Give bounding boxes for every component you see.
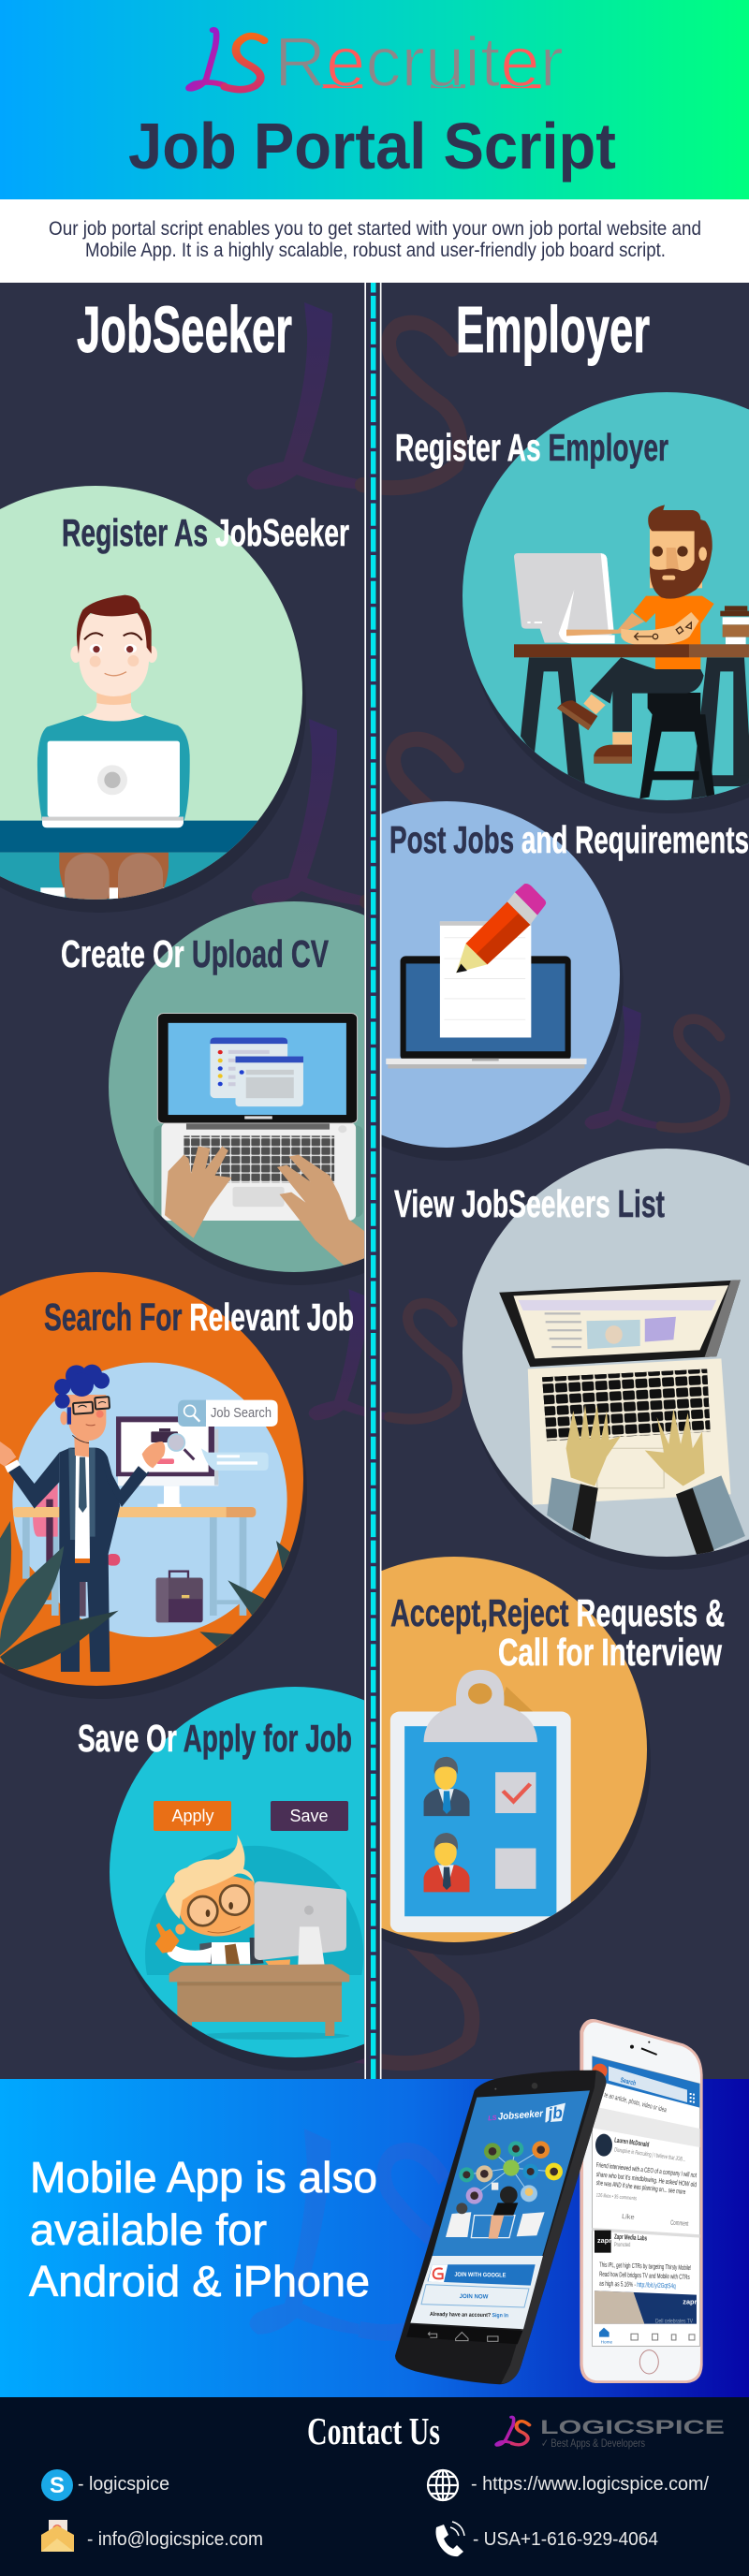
image: iPhone with feed [580, 2019, 703, 2383]
contact: skype [41, 2469, 169, 2501]
panel: mobile app band [0, 2079, 749, 2397]
heading: Contact Us: Contact Us [307, 2409, 440, 2452]
text: mobile app availability: available for [30, 2205, 267, 2254]
step circle: View JobSeekers List [463, 1149, 749, 1570]
step circle: Post Jobs and Requirements [382, 801, 624, 1161]
button: Save [271, 1801, 348, 1831]
contact: website [428, 2470, 709, 2500]
label: Create Or Upload CV: Create Or Upload CV [61, 932, 329, 975]
image: iPhone with feed: zapr [683, 2298, 698, 2306]
background panel: dark body [0, 283, 749, 2079]
label: Register As JobSeeker: Register As JobSeeker [62, 511, 349, 554]
image: iPhone with feed: Like [622, 2212, 635, 2221]
label: Save Or Apply for Job: Save Or Apply for Job [78, 1717, 352, 1760]
intro text [49, 218, 701, 261]
label: Accept, Reject Requests and Call for Interview [390, 1591, 725, 1674]
heading: Employer: Employer [456, 293, 650, 366]
logo: LS Recruiter: Recruiter [274, 22, 564, 101]
step circle: Register As Employer [463, 392, 749, 813]
contact: skype: S [50, 2473, 65, 2498]
image: iPhone with feed: zapr [597, 2236, 611, 2245]
icon: man at desk with apply and save buttons [145, 1801, 363, 2040]
icon: boy with laptop [0, 595, 258, 900]
image: Android phone with job seeker app: Already have an account? Sign In [430, 2312, 508, 2319]
icon: bearded man at desk [514, 505, 749, 798]
image: Android phone with job seeker app: JOIN NOW [460, 2293, 488, 2301]
image: Android phone with job seeker app: jb [545, 2102, 564, 2123]
label: View JobSeekers List: View JobSeekers List [394, 1182, 665, 1225]
icon: top-down laptop with hands [499, 1280, 745, 1557]
image: iPhone with feed: Lauren McDonald [614, 2135, 650, 2148]
step circle: Register As JobSeeker [0, 486, 312, 913]
title: Job Portal Script [128, 110, 616, 183]
logo: Logicspice: LOGICSPICE [540, 2417, 725, 2438]
watermark: LS on blue band [250, 2129, 452, 2334]
step circle: Create Or Upload CV [109, 901, 364, 1285]
step circle: Accept, Reject Requests [382, 1557, 651, 1955]
image: iPhone with feed: Dell celebrates TV [655, 2319, 693, 2325]
logo: Logicspice [496, 2417, 725, 2450]
image: Android phone with job seeker app: LS [488, 2114, 497, 2122]
image: Android phone with job seeker app [395, 2071, 606, 2384]
contact: email: - info@logicspice.com [87, 2529, 263, 2550]
image: iPhone with feed: Zapr Media Labs [614, 2232, 647, 2242]
image: iPhone with feed: Disruptive in Recruiting | I believe that JOB... [614, 2146, 686, 2163]
button: Save: Save [289, 1807, 329, 1825]
intro text: Mobile App. It is a highly scalable, robust and user-friendly job board script. [85, 240, 666, 261]
step circle: Save Or Apply for Job [110, 1687, 364, 2071]
label: Register As Employer: Register As Employer [395, 426, 668, 469]
contact: phone [436, 2522, 658, 2556]
icon: clipboard with candidates [390, 1670, 571, 1932]
divider: central dashed line [364, 283, 382, 2079]
icon: businessman at job search desk [0, 1363, 290, 1672]
intro band [0, 199, 749, 283]
image: iPhone with feed: Read how Dell bridges TV and Mobile with CTRs [599, 2270, 690, 2281]
label: Search For Relevant Job: Search For Relevant Job [44, 1295, 354, 1339]
watermark: repeated LS logo [247, 302, 726, 2065]
text: mobile app availability: Android & iPhone [29, 2257, 370, 2305]
header band [0, 0, 749, 199]
label: Job Search pill: Job Search [211, 1405, 272, 1421]
image: iPhone with feed: Home [601, 2339, 612, 2344]
image: iPhone with feed: Comment [670, 2218, 689, 2228]
contact: phone: - USA+1-616-929-4064 [473, 2529, 658, 2550]
image: iPhone with feed: share who but it's mindblowing. He asked HOW old [595, 2170, 697, 2188]
logo: Logicspice: ✓ Best Apps & Developers [541, 2437, 645, 2450]
image: iPhone with feed: she was AND if she was planning on... see more [595, 2178, 686, 2196]
panel: JobSeeker column circles [0, 486, 484, 2071]
image: Android phone with job seeker app: Jobseeker [497, 2108, 544, 2123]
button: Apply [154, 1801, 231, 1831]
text: mobile app availability: Mobile App is also [30, 2153, 377, 2202]
panel: Employer column circles [261, 392, 749, 1955]
button: Apply: Apply [171, 1807, 214, 1825]
image: iPhone with feed: as high as 5.16% - http://bit.ly/2GqtS4q [599, 2279, 676, 2290]
contact: email [41, 2520, 263, 2552]
image: iPhone with feed: Promoted [614, 2243, 630, 2248]
heading: JobSeeker: JobSeeker [77, 293, 292, 366]
contact: skype: - logicspice [78, 2474, 169, 2495]
icon: laptop with note and pencil [386, 884, 587, 1068]
text: mobile app availability [29, 2153, 377, 2305]
step circle: Search For Relevant Job [0, 1272, 307, 1699]
contact: website: - https://www.logicspice.com/ [471, 2474, 709, 2495]
footer band [0, 2397, 749, 2576]
icon: laptop typing [154, 1014, 365, 1266]
image: Android phone with job seeker app: JOIN WITH GOOGLE [454, 2272, 506, 2279]
image: iPhone with feed: te an article, photo, video or idea [603, 2090, 668, 2115]
image: iPhone with feed: Search [620, 2075, 638, 2087]
image: iPhone with feed: 126 likes • 35 comments [595, 2193, 637, 2202]
